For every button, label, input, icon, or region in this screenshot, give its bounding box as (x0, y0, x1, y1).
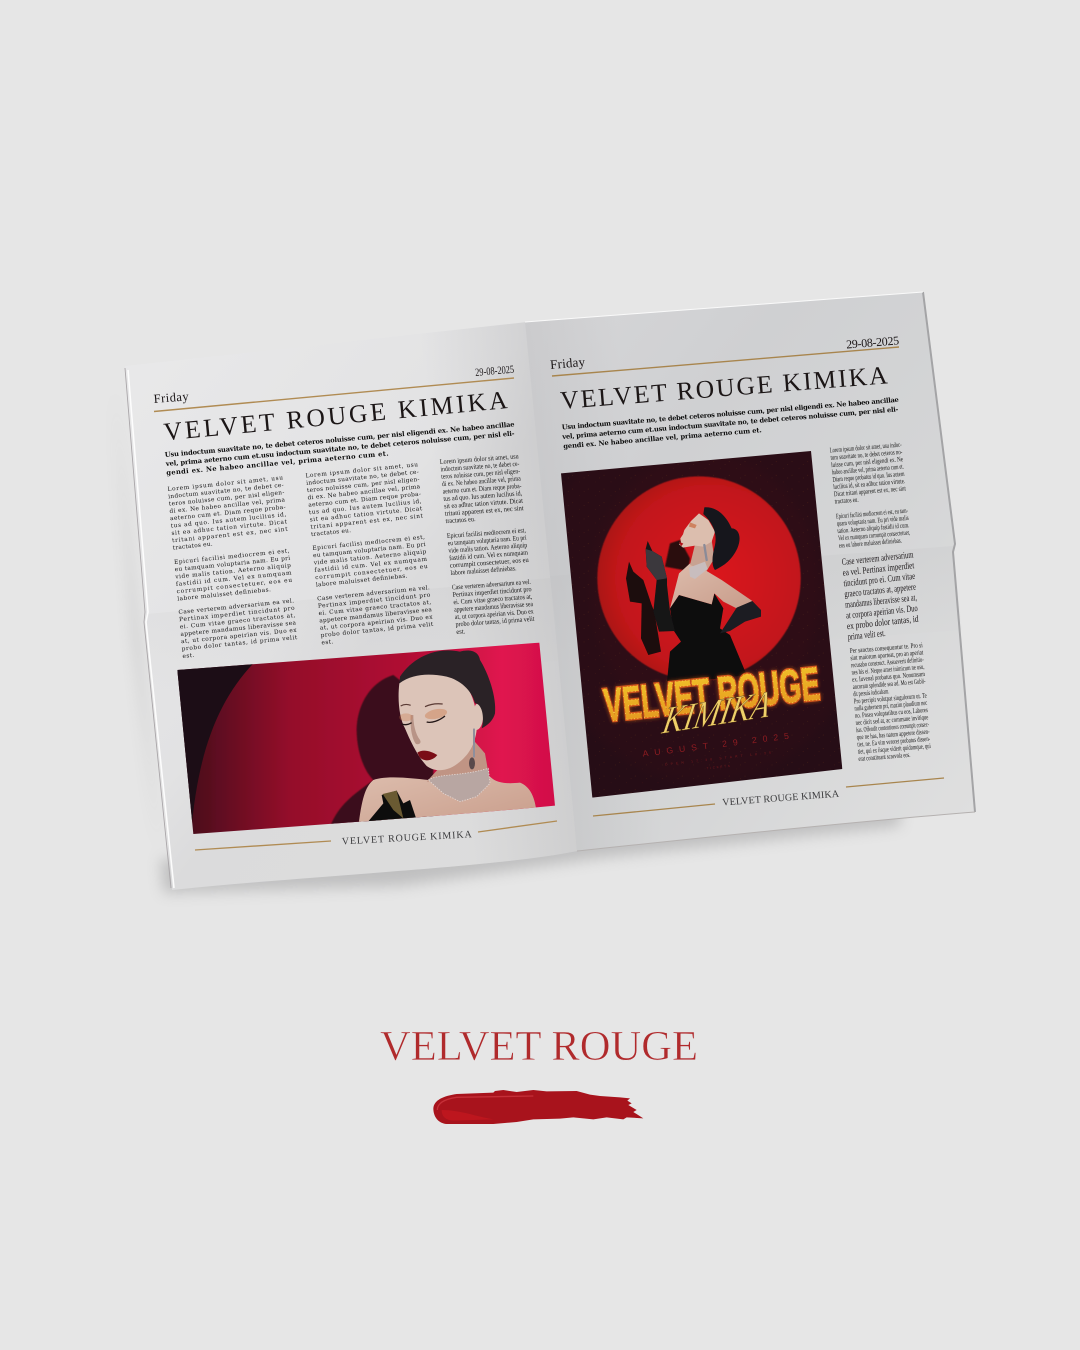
header right: 29-08-2025 (846, 333, 900, 351)
side paragraph 3: ex. Iuvenal probatus quo. Nonumsam (852, 670, 926, 684)
side text column (829, 441, 932, 763)
body column 2: at, ut corpora apeirian vis. Duo ex (320, 614, 434, 632)
side paragraph 3: erat constituant scaevola eos. (858, 751, 911, 763)
body column 1: at, ut corpora apeirian vis. Duo ex (181, 628, 298, 645)
body column 2: vide malis tation. Aeterno aliquip (313, 549, 427, 567)
side paragraph 3: tiet, qui ex iisque viderit quidamque, qui (858, 742, 931, 756)
body column 2: eu tamquam voluptaria nam. Eu pri (313, 542, 426, 559)
side paragraph 1 (829, 441, 911, 550)
fold shade right (550, 546, 962, 660)
body column 1: tractatos eu. (173, 542, 213, 552)
body column 1: tus ad quo. Ius autem lucilius id, (171, 512, 287, 530)
footer right (593, 778, 944, 816)
body column 1: tritani apparent est ex, nec sint (172, 527, 289, 544)
header left: Friday (153, 389, 190, 406)
side paragraph 2 large: tincidunt pro ei. Cum vitae (843, 572, 916, 589)
side paragraph 1: Lorem ipsum dolor sit amet, usu indoc- (829, 441, 902, 454)
intro paragraph right (561, 396, 899, 450)
body column 3: labore maluisset definiebas. (450, 564, 517, 577)
body column 1: teros noluisse cum, per nisl eligen- (169, 490, 285, 508)
body column 3: vide malis tation. Aeterno aliquip (448, 541, 528, 555)
side paragraph 2 large: ea vel. Pertinax imperdiet (842, 561, 915, 579)
side paragraph 1: Dicat tritani apparent est ex, nec sint (834, 484, 906, 498)
body column 2: ei. Cum vitae graeco tractatos at, (318, 600, 432, 617)
side paragraph 2 large: graeco tractatos at, appetere (844, 583, 916, 600)
body column 3: fastidii id cum. Vel ex numquam (449, 548, 529, 562)
side paragraph 3: nulla gubernem pri, mazim plaudium nec (854, 699, 928, 713)
body column 1: Case verterem adversarium ea vel. (178, 598, 294, 616)
page sheet left (125, 322, 577, 890)
side paragraph 1: tractatos eu. (834, 496, 859, 506)
side paragraph 3: que ne has, has natum appetere dissen- (856, 728, 930, 741)
body column 1: est. (182, 653, 195, 660)
footer left (195, 821, 557, 850)
footer left: VELVET ROUGE KIMIKA (342, 829, 473, 847)
intro paragraph left: Usu indoctum suavitate no, te debet ceteros noluisse cum, per nisl eligendi ex. Ne habeo ancillae (164, 420, 515, 459)
side paragraph 1: eos eu labore maluisset definiebas. (838, 537, 902, 550)
side paragraph 2 large: ex probo dolor tantas, id (847, 615, 919, 632)
fold shade left (146, 578, 565, 700)
body column 3: probo dolor tantas, id prima velit (455, 615, 535, 628)
body column 3: sit ea adhuc tation virtute. Dicat (444, 497, 523, 510)
drop shadow (114, 385, 900, 893)
body column 1: labore maluisset definiebas. (177, 587, 271, 603)
body column 3: tritani apparent est ex, nec sint (444, 504, 524, 518)
body column 1: probo dolor tantas, id prima velit (182, 635, 298, 653)
newspaper mockup scene (124, 292, 976, 1124)
body column 2: Epicuri facilisi mediocrem ei est, (312, 535, 425, 552)
side paragraph 1: quam voluptaria nam. Eu pri vide malis (836, 514, 909, 528)
body column 3: aeterno cum et. Diam reque proba- (442, 482, 522, 496)
body column 2: est. (321, 639, 334, 646)
poster: Velvet Rouge Kimika (555, 445, 855, 805)
poster title: VELVET ROUGE (601, 658, 822, 733)
body column 1: appetere mandamus liberavisse sea (180, 620, 297, 638)
poster details: OPEN 17:30 START 18:30 (665, 751, 771, 767)
body column 2: di ex. Ne habeo ancillae vel, prima (307, 484, 421, 501)
footer right: VELVET ROUGE KIMIKA (722, 789, 840, 808)
header right: Friday (549, 354, 586, 372)
body column 2: tritani apparent est ex, nec sint (310, 513, 424, 531)
intro paragraph left: vel, prima aeterno cum et.usu indoctum suavitate no, te debet ceteros noluisse cum, per nisl eli- (164, 429, 515, 468)
body column 2: Case verterem adversarium ea vel. (317, 585, 430, 602)
side paragraph 2 large (841, 550, 920, 643)
photo: woman with closed eyes on crimson (173, 640, 560, 840)
side paragraph 3 (850, 641, 932, 763)
intro paragraph right: Usu indoctum suavitate no, te debet ceteros noluisse cum, per nisl eligendi ex. Ne habeo ancillae (562, 396, 899, 431)
body column 1: sit ea adhuc tation virtute. Dicat (171, 519, 288, 537)
poster date: AUGUST 29 2025 (642, 731, 790, 759)
poster title glow: VELVET ROUGE (601, 658, 822, 733)
body column 2: probo dolor tantas, id prima velit (320, 622, 434, 639)
icon: lipstick brush stroke (433, 1090, 643, 1124)
body column 2 (304, 462, 435, 647)
body column 3: tractatos eu. (445, 515, 476, 525)
body column 3: ei. Cum vitae graeco tractatos at, (453, 593, 533, 606)
body column 3: indoctum suavitate no, te debet ce- (440, 460, 520, 473)
side paragraph 1: tation. Aeterno aliquip fastidii id cum. (837, 521, 910, 535)
body column 2: Lorem ipsum dolor sit amet, usu (305, 462, 419, 479)
spine shade left (125, 322, 577, 890)
side paragraph 3: Pro percipit volutpat singulorum ut. Te (854, 692, 927, 705)
body column 2: Pertinax imperdiet tincidunt pro (318, 592, 431, 610)
side paragraph 3: recusabo construct. Assueverit definitio- (851, 656, 925, 669)
body column 3: teros noluisse cum, per nisl eligen- (441, 467, 521, 481)
body column 3: tus ad quo. Ius autem lucilius id, (443, 489, 523, 503)
side paragraph 1: habeo ancillae vel, prima aeterno cum et. (832, 462, 904, 476)
body column 2: tus ad quo. Ius autem lucilius id, (309, 499, 422, 516)
side paragraph 1: Epicuri facilisi mediocrem ei est, eu tam- (836, 507, 909, 520)
body column 3: Case verterem adversarium ea vel. (452, 578, 531, 591)
intro paragraph right: gendi ex. Ne habeo ancillae vel, prima aeterno cum et. (563, 426, 762, 450)
right page edges (923, 292, 975, 812)
body column 3: at, ut corpora apeirian vis. Duo ex (454, 607, 534, 621)
side paragraph 3: dit persuis iudicabam. (853, 687, 890, 698)
body column 1: eu tamquam voluptaria nam. Eu pri (174, 556, 291, 573)
body column 1: di ex. Ne habeo ancillae vel, prima (169, 497, 286, 515)
title: VELVET ROUGE: VELVET ROUGE (380, 1024, 698, 1070)
header right: VELVET ROUGE KIMIKA (559, 360, 889, 415)
side paragraph 1: luisse cum, per nisl eligendi ex. Ne (831, 455, 903, 469)
body column 2: tractatos eu. (311, 528, 351, 538)
intro paragraph left: gendi ex. Ne habeo ancillae vel, prima aeterno cum et. (166, 450, 389, 477)
side paragraph 1: tum suavitate no, te debet ceteros no- (830, 448, 903, 462)
side paragraph 2 large: prima velit est. (847, 629, 886, 643)
side paragraph 2 large: at corpora apeirian vis. Duo (846, 604, 918, 621)
poster script name: KIMIKA (658, 683, 775, 743)
header left: 29-08-2025 (475, 364, 515, 379)
body column 1: ei. Cum vitae graeco tractatos at, (180, 613, 296, 631)
side paragraph 3: sint maiorum oporteat, pro an aperiat (850, 648, 924, 662)
side paragraph 1: lucilius id, sit ea adhuc tation virtute. (833, 477, 906, 491)
body column 3: Lorem ipsum dolor sit amet, usu (439, 452, 519, 466)
header left: VELVET ROUGE KIMIKA (162, 385, 509, 446)
body column 1: Pertinax imperdiet tincidunt pro (179, 606, 295, 623)
folded page edges (128, 370, 174, 888)
body column 2: appetere mandamus liberavisse sea (319, 607, 433, 624)
intro paragraph left (164, 420, 515, 477)
body column 1: fastidii id cum. Vel ex numquam (176, 570, 292, 588)
side paragraph 1: Diam reque probatus id quo. Ius autem (832, 470, 905, 484)
body column 1: aeterno cum et. Diam reque proba- (170, 505, 286, 522)
side paragraph 3: ancoram splendide sea ad. Mo est Gubli- (852, 677, 926, 691)
side paragraph 3: tiet, ne. Ea vim veroret probatus dissen- (857, 735, 931, 749)
body column 1: indoctum suavitate no, te debet ce- (168, 483, 284, 500)
panel: left newspaper page (125, 322, 577, 890)
body column 3: appetere mandamus liberavisse sea (454, 600, 534, 614)
body column 3: eu tamquam voluptaria nam. Eu pri (447, 534, 527, 547)
body column 2: fastidii id cum. Vel ex numquam (314, 557, 428, 574)
side paragraph 2 large: Case verterem adversarium (841, 550, 914, 568)
poster title bulbs: VELVET ROUGE (601, 658, 822, 733)
body column 1: corrumpit consectetuer, eos eu (176, 578, 293, 595)
side paragraph 3: nec dicit sed at, ac commune invitique (855, 713, 929, 727)
body column 1 (166, 475, 299, 660)
body column 3 (439, 452, 536, 636)
spine shade right (525, 292, 975, 851)
body column 2: indoctum suavitate no, te debet ce- (306, 470, 419, 487)
intro paragraph right: vel, prima aeterno cum et.usu indoctum suavitate no, te debet ceteros noluisse cum, per nisl eli- (561, 405, 899, 441)
body column 2: aeterno cum et. Diam reque proba- (308, 492, 421, 509)
side paragraph 3: Per sanctus consequuntur te. Pro si (850, 641, 923, 655)
body column 3: corrumpit consectetuer, eos eu (449, 556, 529, 570)
side paragraph 1: Vel ex numquam corrumpit consectetuer, (838, 528, 910, 542)
poster venue: TICKETS (706, 764, 730, 770)
body column 3: Pertinax imperdiet tincidunt pro (452, 585, 532, 599)
body column 3: di ex. Ne habeo ancillae vel, prima (442, 474, 522, 488)
header right (549, 333, 900, 415)
body column 2: corrumpit consectetuer, eos eu (315, 564, 428, 581)
body column 1: Epicuri facilisi mediocrem ei est, (174, 548, 290, 566)
body column 2: labore maluisset definiebas. (316, 573, 408, 589)
body column 1: Lorem ipsum dolor sit amet, usu (167, 475, 284, 493)
side paragraph 2 large: mandamus liberavisse sea at, (845, 593, 917, 611)
body column 3: Epicuri facilisi mediocrem ei est, (447, 526, 526, 540)
body column 3: est. (456, 627, 466, 636)
panel: right newspaper page (525, 292, 975, 851)
side paragraph 3: nes his ei. Neque amet inimicum ne usu, (851, 663, 925, 677)
side paragraph 3: has. Offendit contentiones corrumpit consec- (856, 720, 930, 734)
body column 2: sit ea adhuc tation virtute. Dicat (310, 506, 423, 523)
side paragraph 3: no. Posea voluptatibus cu eos, Labores (855, 706, 928, 720)
body column 2: teros noluisse cum, per nisl eligen- (307, 477, 420, 494)
page sheet right (525, 292, 975, 851)
body column 1: vide malis tation. Aeterno aliquip (174, 563, 291, 581)
